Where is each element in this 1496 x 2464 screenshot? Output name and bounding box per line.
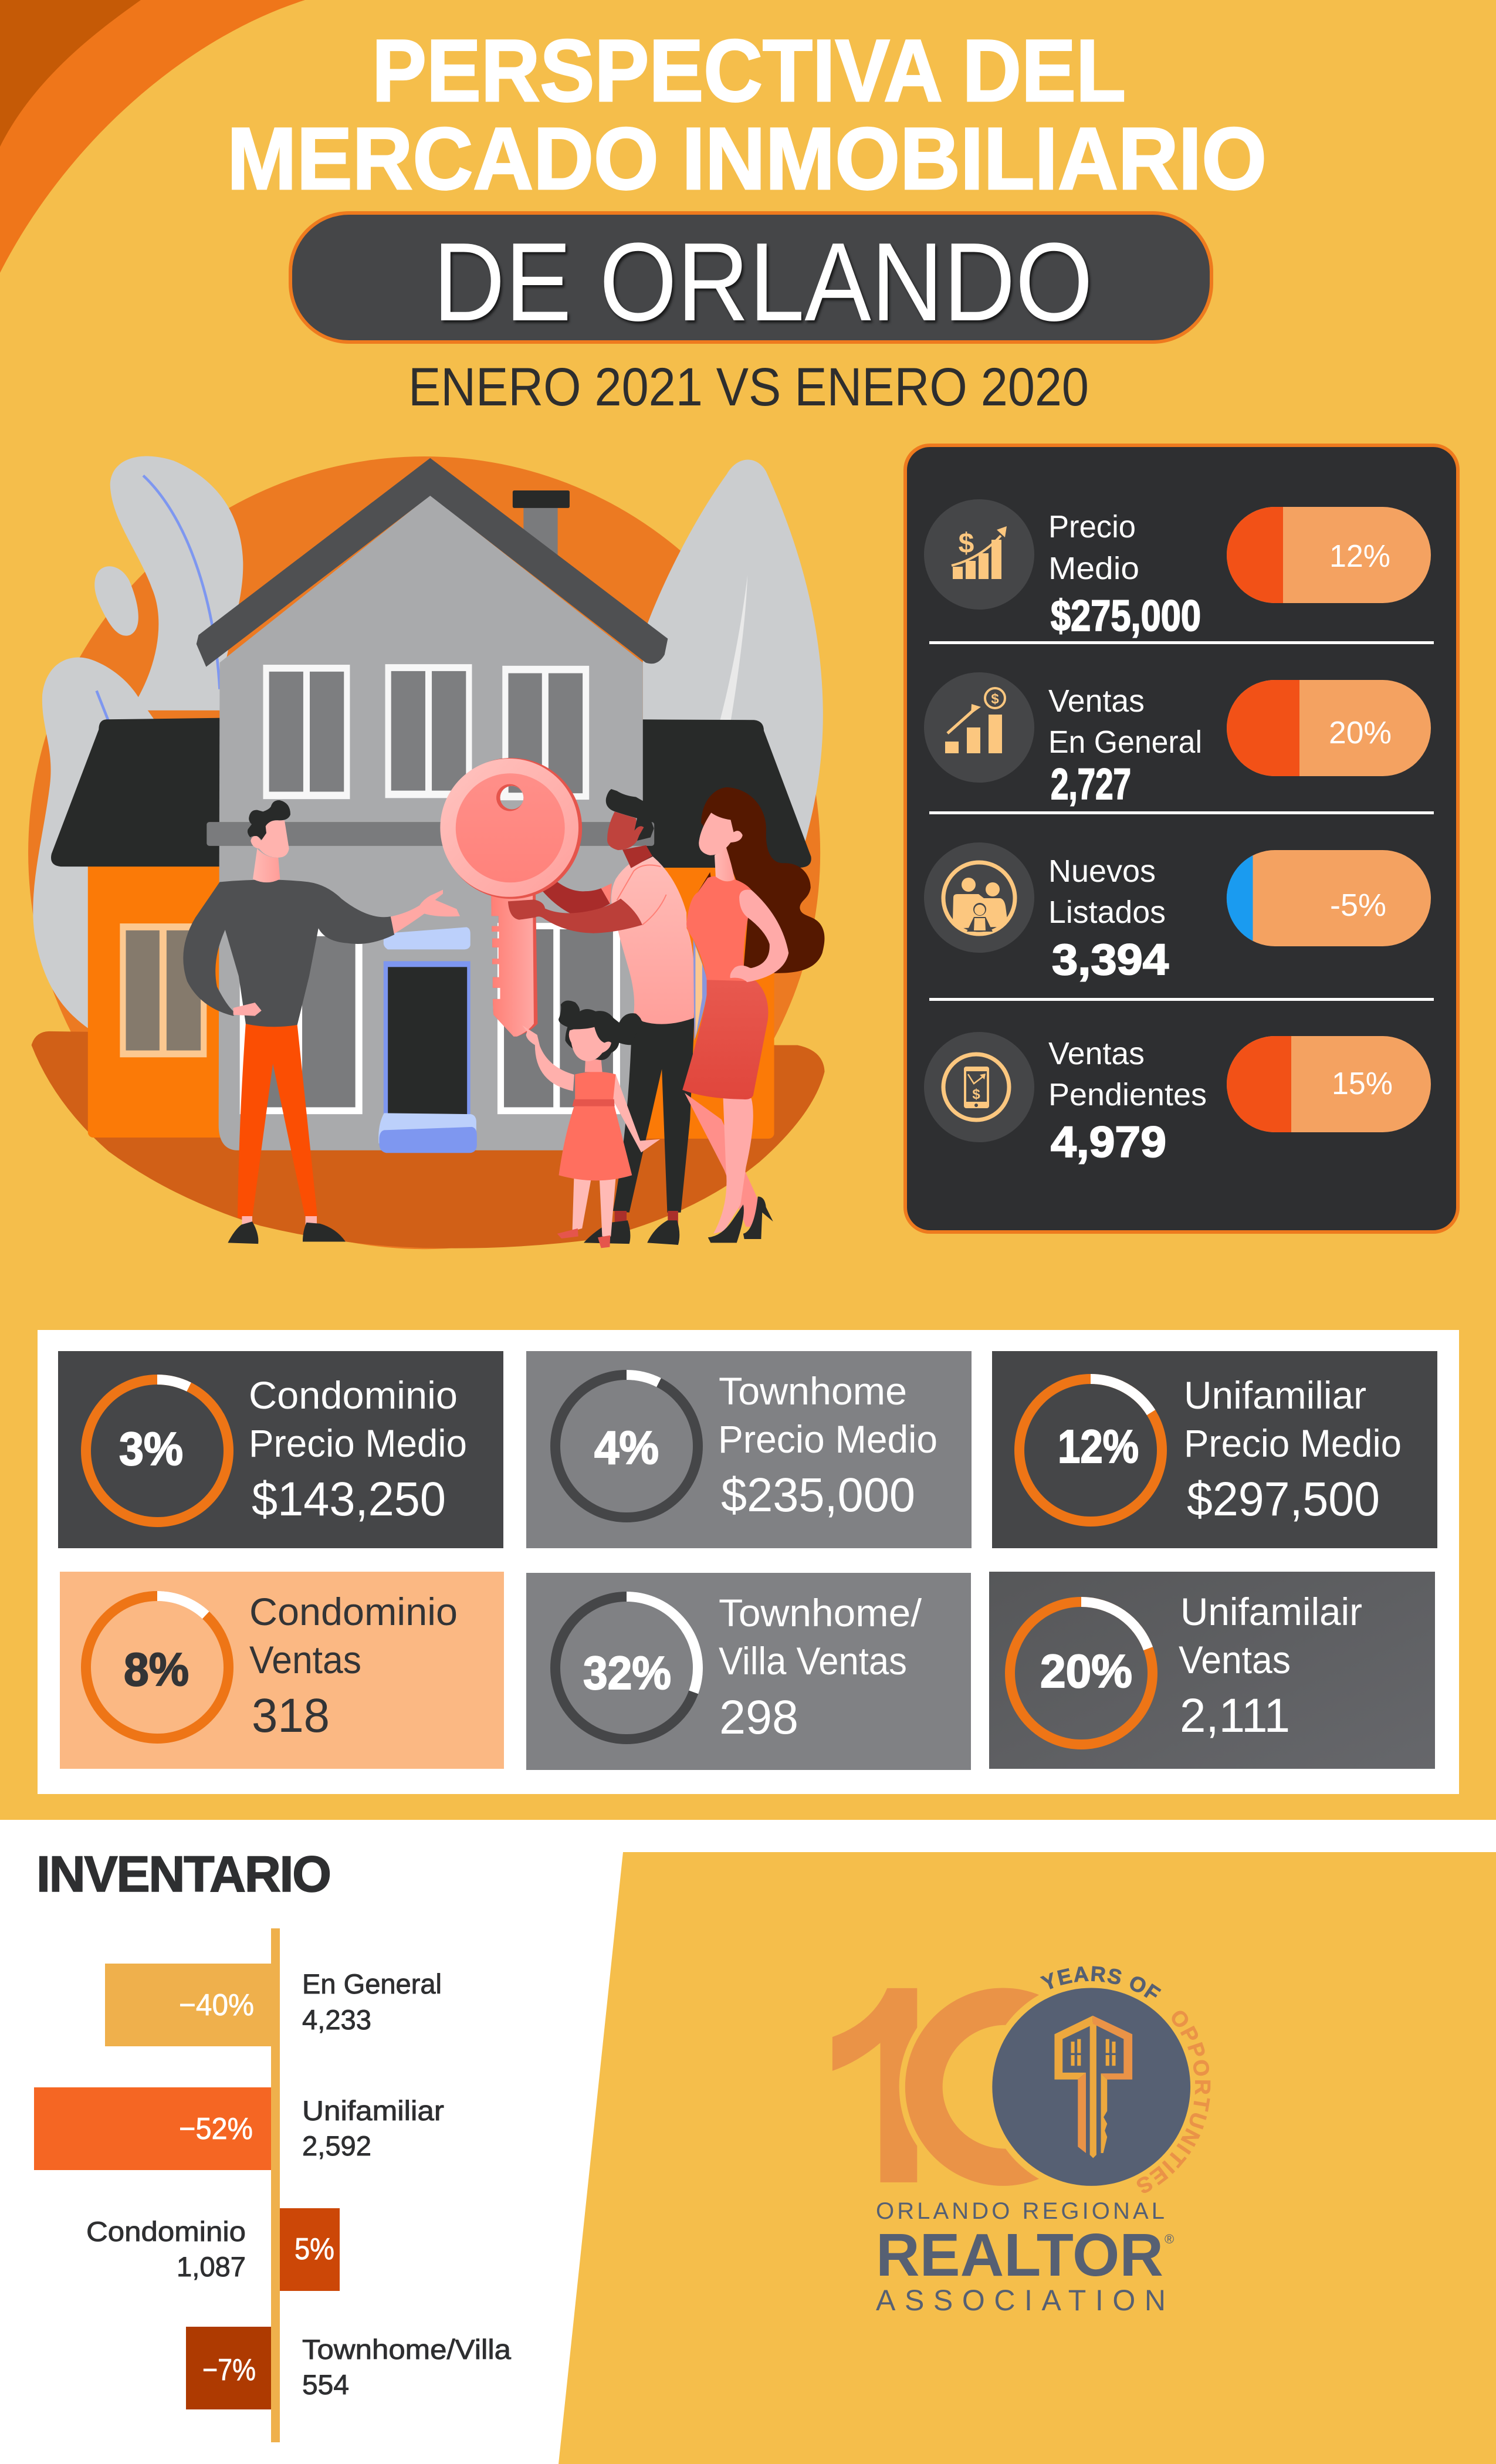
label: Precio [1048, 509, 1136, 544]
icon: rising price chart: $ [959, 528, 974, 559]
title line 1: PERSPECTIVA DEL [372, 21, 1126, 120]
card: townhome precio medio: Townhome [719, 1369, 907, 1413]
logo wordmark: ORLANDO REGIONAL [876, 2198, 1165, 2224]
woman heels [708, 1197, 773, 1243]
title line 2: MERCADO INMOBILIARIO [227, 109, 1267, 208]
bar: unifamiliar: −52% [179, 2112, 253, 2146]
man left shoes [228, 1216, 346, 1244]
pill: 20%: 20% [1329, 715, 1392, 750]
bar: condominio: 1,087 [177, 2251, 246, 2282]
card: condominio precio medio: Precio Medio [249, 1421, 467, 1465]
bar: townhome villa: −7% [202, 2353, 256, 2387]
card: townhome precio medio: 4% [594, 1421, 659, 1474]
label: Pendientes [1048, 1077, 1207, 1112]
card: unifamiliar ventas: Unifamilair [1180, 1590, 1362, 1633]
label: Ventas [1048, 1036, 1145, 1071]
icon: phone sales [924, 1032, 1034, 1142]
card: unifamiliar precio medio: $297,500 [1187, 1473, 1380, 1526]
card: unifamiliar precio medio: Precio Medio [1184, 1421, 1402, 1465]
arc text: opportunities: OPPORTUNITIES [1137, 2011, 1211, 2193]
bar: condominio: Condominio [86, 2216, 246, 2247]
value: 3,394 [1052, 935, 1169, 984]
corner swoosh decoration [0, 0, 305, 273]
man right near arm [508, 899, 642, 933]
man right hair [606, 789, 654, 841]
card: unifamiliar ventas: Ventas [1179, 1638, 1291, 1681]
label: Listados [1048, 895, 1166, 930]
yellow footer panel [559, 1852, 1496, 2464]
woman face [699, 813, 743, 855]
value: 4,979 [1051, 1118, 1166, 1166]
pill: 12%: 12% [1329, 539, 1390, 574]
card: condominio ventas: Condominio [249, 1590, 458, 1633]
pill: 15% [1227, 1036, 1431, 1132]
bar: townhome villa: Townhome/Villa [302, 2334, 512, 2365]
card: condominio ventas: 318 [252, 1689, 330, 1742]
card: unifamiliar ventas: 20% [1040, 1645, 1132, 1697]
man left pants [238, 1023, 317, 1218]
card: townhome precio medio [526, 1351, 972, 1548]
bar: en general: 4,233 [302, 2004, 371, 2035]
man left sweater [183, 880, 394, 1027]
bar: townhome villa: 554 [302, 2369, 349, 2400]
door [378, 927, 477, 1153]
orange sun circle [28, 456, 820, 1249]
icon: family [924, 842, 1034, 953]
main house body [219, 495, 643, 1150]
value: $275,000 [1051, 591, 1201, 640]
label: Nuevos [1048, 854, 1156, 889]
pill: -5% [1227, 850, 1431, 946]
chimney [513, 490, 570, 564]
card: townhome precio medio: Precio Medio [718, 1417, 937, 1461]
woman top [686, 876, 752, 981]
title [227, 21, 1267, 208]
man right neck [622, 845, 652, 868]
illustration: house and family with key [28, 456, 825, 1249]
row: nuevos listados [924, 842, 1431, 984]
girl lower body [557, 1072, 660, 1248]
card: condominio ventas: 8% [124, 1643, 189, 1695]
card: unifamiliar precio medio: 12% [1058, 1420, 1139, 1473]
card: townhome villa ventas: Villa Ventas [719, 1639, 907, 1683]
card: unifamiliar ventas [989, 1572, 1435, 1769]
card: townhome villa ventas: 298 [719, 1691, 798, 1744]
ground [32, 1031, 825, 1248]
roof [197, 458, 668, 667]
man right shirt [611, 857, 695, 1024]
woman skirt [682, 977, 768, 1099]
leaf veins [97, 476, 220, 721]
house scene [28, 456, 825, 1249]
man left hip hand [233, 1003, 262, 1016]
man right and woman upper bodies [508, 787, 824, 1099]
card: condominio precio medio: Condominio [249, 1373, 458, 1417]
pill: 20% [1227, 680, 1431, 776]
woman arm [730, 889, 788, 982]
card: condominio ventas [60, 1572, 504, 1769]
card: townhome villa ventas: Townhome/ [719, 1591, 922, 1634]
left wing [51, 718, 229, 1138]
subtitle: ENERO 2021 VS ENERO 2020 [408, 357, 1089, 417]
card: condominio precio medio [58, 1351, 503, 1548]
label: Ventas [1048, 683, 1145, 719]
shirt seams [617, 865, 666, 925]
heading: INVENTARIO [36, 1846, 331, 1903]
bar: en general: −40% [179, 1988, 254, 2022]
card: condominio precio medio: $143,250 [252, 1473, 446, 1526]
leaves [33, 456, 823, 1028]
icon: phone sales: $ [972, 1087, 980, 1102]
row: ventas en general [924, 672, 1431, 808]
logo: 10 years [832, 1966, 1211, 2317]
card: townhome precio medio: $235,000 [721, 1468, 915, 1522]
lower windows [240, 923, 620, 1114]
woman legs [685, 1093, 758, 1227]
bar: townhome villa [186, 2327, 512, 2409]
icon: sales growth: $ [991, 691, 999, 707]
icon: sales growth [924, 672, 1034, 783]
bar: condominio: 5% [295, 2232, 334, 2266]
card: townhome villa ventas [526, 1573, 971, 1770]
card: unifamiliar ventas: 2,111 [1180, 1689, 1290, 1742]
woman neck [715, 848, 735, 881]
man right legs [584, 1017, 773, 1245]
panel: inventario [0, 1820, 1496, 2464]
house band [207, 822, 654, 846]
man left head and hand [248, 800, 460, 934]
logo wordmark: REALTOR [876, 2221, 1163, 2289]
pill: -5%: -5% [1330, 888, 1386, 923]
logo mark [832, 1981, 1197, 2193]
leaf highlight [720, 575, 747, 721]
man right face [607, 811, 644, 850]
label: En General [1048, 725, 1202, 760]
row: precio medio [924, 499, 1431, 640]
right wing [635, 719, 811, 1139]
key with far arm [440, 758, 612, 1037]
value: 2,727 [1051, 760, 1131, 808]
logo wordmark: ® [1165, 2232, 1174, 2246]
bar: unifamiliar: 2,592 [302, 2130, 371, 2161]
logo wordmark: ASSOCIATION [876, 2284, 1166, 2317]
city name: DE ORLANDO [433, 220, 1093, 344]
icon: rising price chart [924, 499, 1034, 610]
row: ventas pendientes [924, 1032, 1431, 1166]
key icon [1054, 2016, 1132, 2158]
logo wordmark [876, 2198, 1174, 2317]
arc text: years of: YEARS OF [1040, 1966, 1162, 1998]
bar: en general [105, 1964, 442, 2046]
upper windows [263, 664, 589, 800]
pill: 15%: 15% [1332, 1066, 1393, 1101]
card: unifamiliar precio medio [992, 1351, 1437, 1548]
woman hair [701, 787, 824, 973]
pill: 12% [1227, 507, 1431, 603]
bar chart [34, 1928, 512, 2442]
panel: market stats [905, 445, 1458, 1232]
card: unifamiliar precio medio: Unifamiliar [1184, 1373, 1366, 1417]
card: condominio ventas: Ventas [249, 1638, 361, 1681]
card: condominio precio medio: 3% [119, 1423, 183, 1475]
panel: property type cards [38, 1330, 1459, 1794]
bar: unifamiliar: Unifamiliar [302, 2095, 444, 2126]
man left lower body [183, 880, 394, 1244]
bar: en general: En General [302, 1968, 442, 1999]
card: townhome villa ventas: 32% [583, 1647, 671, 1699]
label: Medio [1048, 551, 1139, 586]
girl upper body [522, 1001, 642, 1091]
bar: condominio [86, 2208, 340, 2291]
bar: unifamiliar [34, 2087, 444, 2170]
city pill banner [290, 213, 1211, 344]
background strip [693, 939, 708, 1041]
